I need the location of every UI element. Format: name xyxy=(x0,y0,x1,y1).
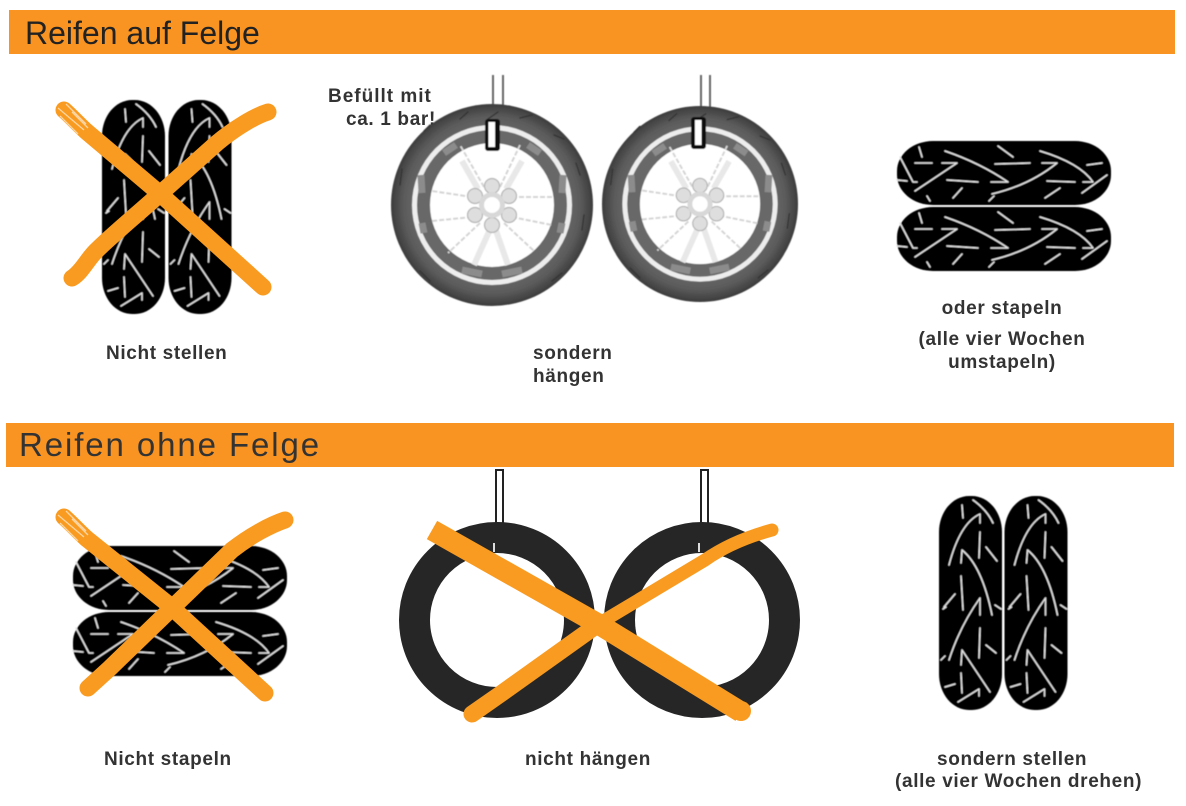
icon: stacked tires crossed out xyxy=(58,511,287,693)
label: oder stapeln: (alle vier Wochen xyxy=(919,329,1085,350)
label: nicht hängen: nicht hängen xyxy=(525,749,651,770)
tire ring left xyxy=(414,538,580,702)
label: sondern stellen: sondern stellen xyxy=(937,749,1087,770)
header: Reifen auf Felge xyxy=(9,10,1175,54)
header: Reifen ohne Felge xyxy=(6,423,1174,467)
cross stroke falling end xyxy=(731,701,751,721)
label: Nicht stapeln: Nicht stapeln xyxy=(104,749,232,770)
label: oder stapeln: umstapeln) xyxy=(948,352,1056,373)
label: sondern stellen: (alle vier Wochen drehen) xyxy=(895,771,1142,792)
wheel left xyxy=(391,75,593,306)
hanger ticks xyxy=(494,543,699,552)
label: sondern hängen: sondern xyxy=(533,343,613,364)
icon: two standing tires xyxy=(939,496,1068,710)
annotation: ca. 1 bar: ca. 1 bar! xyxy=(346,109,436,130)
header: Reifen auf Felge: Reifen auf Felge xyxy=(25,15,260,51)
label: sondern stellen xyxy=(895,749,1142,792)
icon: two stacked tires xyxy=(897,141,1111,271)
label: sondern hängen xyxy=(533,343,613,387)
annotation: Befüllt mit: Befüllt mit xyxy=(328,86,432,107)
icon: two standing tires crossed out xyxy=(58,100,268,314)
label: oder stapeln xyxy=(919,298,1085,373)
cross stroke falling xyxy=(432,530,741,712)
label: oder stapeln: oder stapeln xyxy=(942,298,1062,319)
label: Nicht stellen: Nicht stellen xyxy=(106,343,227,364)
hanger right xyxy=(701,470,708,524)
wheel right xyxy=(602,75,798,302)
cross stroke rising upper xyxy=(600,530,772,623)
cross stroke rising lower xyxy=(472,623,600,714)
hanger left xyxy=(496,470,503,524)
icon: hanging tires crossed out xyxy=(414,470,784,721)
label: sondern hängen: hängen xyxy=(533,366,604,387)
icon: hanging wheels on rim xyxy=(391,75,798,306)
tire ring right xyxy=(620,538,784,702)
header: Reifen ohne Felge: Reifen ohne Felge xyxy=(19,426,321,463)
